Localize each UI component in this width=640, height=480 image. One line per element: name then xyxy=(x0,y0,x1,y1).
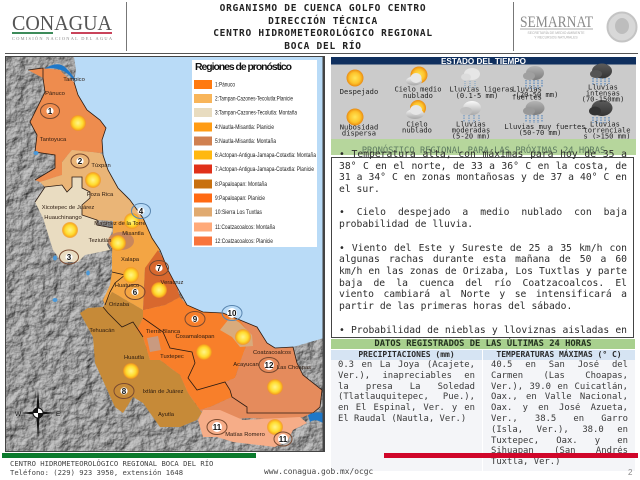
weather labels: Lluvias xyxy=(590,120,620,128)
weather labels: Despejado xyxy=(340,87,378,96)
map panel xyxy=(5,56,325,452)
legend: 4:Nautla-Misantla: Planicie xyxy=(215,124,274,131)
forecast text lines: probabilidad de lluvia. xyxy=(339,219,473,230)
icon: lluvias moderadas xyxy=(460,101,481,123)
city labels: Tuxtepec xyxy=(160,354,184,360)
logo: SEMARNAT: SEMARNAT xyxy=(520,14,593,31)
weather labels: intensas xyxy=(586,88,620,98)
city labels: Túxpan xyxy=(91,163,111,169)
weather labels: Lluvias muy fuertes xyxy=(504,122,586,131)
weather labels: (20-50 mm) xyxy=(516,90,558,99)
region number markers: 4 xyxy=(139,207,144,216)
table body: temperaturas: Tuxtepec, Oax. y en xyxy=(491,436,628,446)
city labels: Xalapa xyxy=(121,257,140,263)
city labels: Coatzacoalcos xyxy=(253,350,291,356)
weather labels: Lluvias ligeras xyxy=(449,84,514,94)
logo: CONAGUA: CONAGUA xyxy=(12,11,113,35)
sea xyxy=(74,57,324,348)
logo: CONAGUA: COMISIÓN NACIONAL DEL AGUA xyxy=(12,36,113,41)
page number: 2 xyxy=(628,468,632,477)
region number markers: 3 xyxy=(67,253,72,262)
legend: 8:Papaloapan: Montaña xyxy=(215,181,267,188)
table body: precipitaciones xyxy=(331,360,482,471)
region boundaries xyxy=(28,68,322,413)
weather labels xyxy=(340,82,630,140)
weather labels: Lluvias xyxy=(512,84,542,94)
city labels: Pánuco xyxy=(45,91,65,97)
forecast suns xyxy=(62,115,283,435)
region number markers: 8 xyxy=(122,387,127,396)
icon: cielo medio nublado xyxy=(406,66,428,86)
city labels: Matías Romero xyxy=(225,432,265,438)
footer contact text xyxy=(10,459,213,477)
city labels: Teziutlán xyxy=(89,238,111,244)
forecast text lines: viento cambiará al Norte y se intensificará a xyxy=(339,289,627,300)
city labels: Veracruz xyxy=(161,280,184,286)
city labels: Tehuacán xyxy=(89,328,115,334)
footer green bar xyxy=(2,453,256,458)
band: datos registrados heading: DATOS REGISTRADOS DE LAS ÚLTIMAS 24 HORAS xyxy=(374,338,592,348)
weather labels: torrenciale xyxy=(584,126,630,134)
forecast text lines: • Temperatura alta, con máximas para hoy de 35 a xyxy=(339,148,627,160)
table column header: precipitaciones xyxy=(331,350,482,360)
forecast text lines: baja de la cuenca del río Coatzacoalcos. El xyxy=(339,278,627,288)
city labels: Tantoyuca xyxy=(40,137,67,143)
weather labels: Nubosidad xyxy=(340,122,378,132)
table column header: temperaturas: TEMPERATURAS MÁXIMAS (° C) xyxy=(496,350,622,359)
icon: lluvias intensas xyxy=(590,64,612,86)
logo: SEMARNAT: Y RECURSOS NATURALES xyxy=(534,36,578,40)
region number markers: 1 xyxy=(48,107,53,116)
table body: temperaturas: Tuxtla, Ver.) xyxy=(491,457,560,467)
title block: DIRECCIÓN TÉCNICA xyxy=(268,16,378,26)
legend: 11:Coatzacoalcos: Montaña xyxy=(215,224,275,231)
legend: 2:Tampan-Cazones-Tecolutla:Planicie xyxy=(215,96,293,102)
band: pronóstico regional heading xyxy=(331,139,636,155)
legend: 1:Pánuco xyxy=(215,82,235,88)
forecast text lines: 38° C en el norte, de 33 a 36° C en la costa, de xyxy=(339,160,627,172)
table body: temperaturas: Ver.), 39.0 en Cuicatlán, xyxy=(491,382,628,392)
forecast text lines xyxy=(339,148,627,336)
legend: 12:Coatzacoalcos: Planicie xyxy=(215,238,273,245)
weather labels: nublado xyxy=(403,91,433,100)
forecast text lines: • Cielo despejado a medio nublado con baja xyxy=(339,207,627,218)
compass rose: E xyxy=(56,411,61,418)
terrain background xyxy=(6,57,324,451)
weather labels: (50-70 mm) xyxy=(519,128,561,137)
table body: precipitaciones: (Tlatlauquitepec, Pue.), xyxy=(338,392,475,402)
city labels: Acayucan xyxy=(233,362,259,368)
footer red bar xyxy=(384,453,638,458)
band: datos registrados heading xyxy=(331,338,635,349)
table body: precipitaciones: la presa La Soledad xyxy=(338,382,475,392)
icon: despejado xyxy=(346,70,364,86)
footer contact text: Teléfono: (229) 923 3950, extensión 1648 xyxy=(10,468,183,477)
compass rose: W xyxy=(15,411,22,418)
table body: temperaturas: Carmen (Las Choapas, xyxy=(491,371,628,381)
forecast text lines: 31 a 34° C en zonas montañosas y de 37 a 40° C en xyxy=(339,172,627,183)
weather labels: (0.1-5 mm) xyxy=(456,91,498,100)
city labels: Las Choapas xyxy=(277,365,311,371)
city labels: Martínez de la Torre xyxy=(94,221,146,227)
city labels: Tierra Blanca xyxy=(146,329,181,335)
icon: lluvias muy fuertes xyxy=(523,101,544,123)
icon: cielo nublado xyxy=(406,100,426,119)
region number markers: 7 xyxy=(157,264,162,273)
city labels: Huauchinango xyxy=(44,215,82,221)
table body: temperaturas: Sihuapan (San Andrés xyxy=(491,446,628,456)
logo: SEMARNAT xyxy=(520,12,638,42)
weather labels: moderadas xyxy=(452,126,490,134)
icon: lluvias fuertes xyxy=(523,66,544,89)
weather labels: fuertes xyxy=(512,92,542,102)
weather labels: Lluvias xyxy=(456,120,486,128)
grey background xyxy=(331,64,636,139)
table body: temperaturas: Ver., 38.5 en Garro xyxy=(491,414,628,424)
band: pronóstico regional heading: PRONÓSTICO REGIONAL PARA LAS PRÓXIMAS 24 HORAS xyxy=(362,146,605,156)
region number markers: 12 xyxy=(265,361,274,370)
region number markers: 11 xyxy=(213,423,222,432)
weather labels: Cielo xyxy=(406,120,428,128)
icon: lluvias ligeras xyxy=(461,68,480,89)
legend: 10:Sierra Los Tuxtlas xyxy=(215,209,263,216)
header divider right xyxy=(513,2,514,51)
city labels: Ayutla xyxy=(158,412,175,418)
table body: precipitaciones: El Raudal (Nautla, Ver.) xyxy=(338,414,466,424)
logo: SEMARNAT: SECRETARÍA DE MEDIO AMBIENTE xyxy=(527,31,585,35)
table body: temperaturas: (Isla, Ver.), 38.0 en xyxy=(491,425,628,435)
table body: temperaturas: Oax. y en José Azueta, xyxy=(491,403,628,413)
region number markers: 6 xyxy=(133,288,138,297)
region number markers xyxy=(40,104,292,446)
weather labels: dispersa xyxy=(342,128,376,138)
city labels: Cosamaloapan xyxy=(176,334,214,340)
footer contact text: CENTRO HIDROMETEOROLÓGICO REGIONAL BOCA DEL RÍO xyxy=(10,459,213,468)
compass rose xyxy=(15,390,61,438)
forecast text lines: partir de las primeras horas del sábado. xyxy=(339,301,572,312)
city labels: Huatusco xyxy=(115,283,139,289)
forecast text lines: km/h en las zonas de Orizaba, Los Tuxtlas y parte xyxy=(339,266,627,277)
header divider left xyxy=(126,2,127,51)
region number markers: 11 xyxy=(279,435,288,444)
legend: 9:Papaloapan: Planicie xyxy=(215,195,265,202)
table body: temperaturas: 40.5 en San José del xyxy=(491,360,628,370)
city labels: Misantla xyxy=(122,231,145,237)
icon: lluvias torrenciales xyxy=(589,100,612,124)
heading bar xyxy=(331,57,636,66)
title block xyxy=(213,2,433,52)
table body: precipitaciones: 0.3 en La Joya (Acajete, xyxy=(338,360,475,370)
forecast text lines: • Probabilidad de nieblas y lloviznas aisladas en xyxy=(339,324,627,336)
table column header: precipitaciones: PRECIPITACIONES (mm) xyxy=(358,350,455,359)
city labels xyxy=(40,77,311,438)
table body: temperaturas xyxy=(483,360,635,471)
city labels: Xicotepec de Juárez xyxy=(42,205,94,211)
legend xyxy=(192,57,324,451)
forecast text lines: algunas rachas durante esta mañana de 50 a 60 xyxy=(339,254,627,265)
weather labels: Lluvias xyxy=(588,82,618,92)
icon: nubosidad dispersa xyxy=(346,108,364,126)
title block: CENTRO HIDROMETEOROLÓGICO REGIONAL xyxy=(213,28,433,39)
forecast text lines: el sur. xyxy=(339,184,380,195)
city labels: Orizaba xyxy=(109,302,130,308)
city labels: Poza Rica xyxy=(87,192,114,198)
region number markers: 10 xyxy=(228,309,237,318)
city labels: Tampico xyxy=(63,77,85,83)
water bodies xyxy=(34,64,323,423)
forecast text lines: • Viento del Este y Sureste de 25 a 35 km/h con xyxy=(339,242,627,254)
table body: temperaturas: Oax., en Valle Nacional, xyxy=(491,392,628,402)
footer url: www.conagua.gob.mx/ocgc xyxy=(264,467,373,476)
title block: ORGANISMO DE CUENCA GOLFO CENTRO xyxy=(220,2,426,14)
legend: 5:Nautla-Misantla: Montaña xyxy=(215,138,276,145)
forecast regions xyxy=(28,68,322,447)
weather labels: nublado xyxy=(402,126,432,134)
panel: estado del tiempo xyxy=(331,57,636,139)
table body: precipitaciones: Ver.), inapreciables en xyxy=(338,371,475,381)
weather labels: Cielo medio xyxy=(395,84,441,94)
region number markers: 2 xyxy=(78,157,83,166)
weather labels: (70-150mm) xyxy=(582,94,624,104)
header rule xyxy=(5,53,638,54)
table body: precipitaciones: en El Espinal, Ver. y en xyxy=(338,403,475,413)
title block: BOCA DEL RÍO xyxy=(284,40,362,52)
city labels: Ixtlán de Juárez xyxy=(143,389,184,395)
panel: forecast text xyxy=(331,157,634,338)
city labels: Huautla xyxy=(124,355,145,361)
region number markers: 9 xyxy=(193,315,198,324)
legend: Regiones de pronóstico xyxy=(195,62,292,73)
heading bar: ESTADO DEL TIEMPO xyxy=(441,57,527,66)
